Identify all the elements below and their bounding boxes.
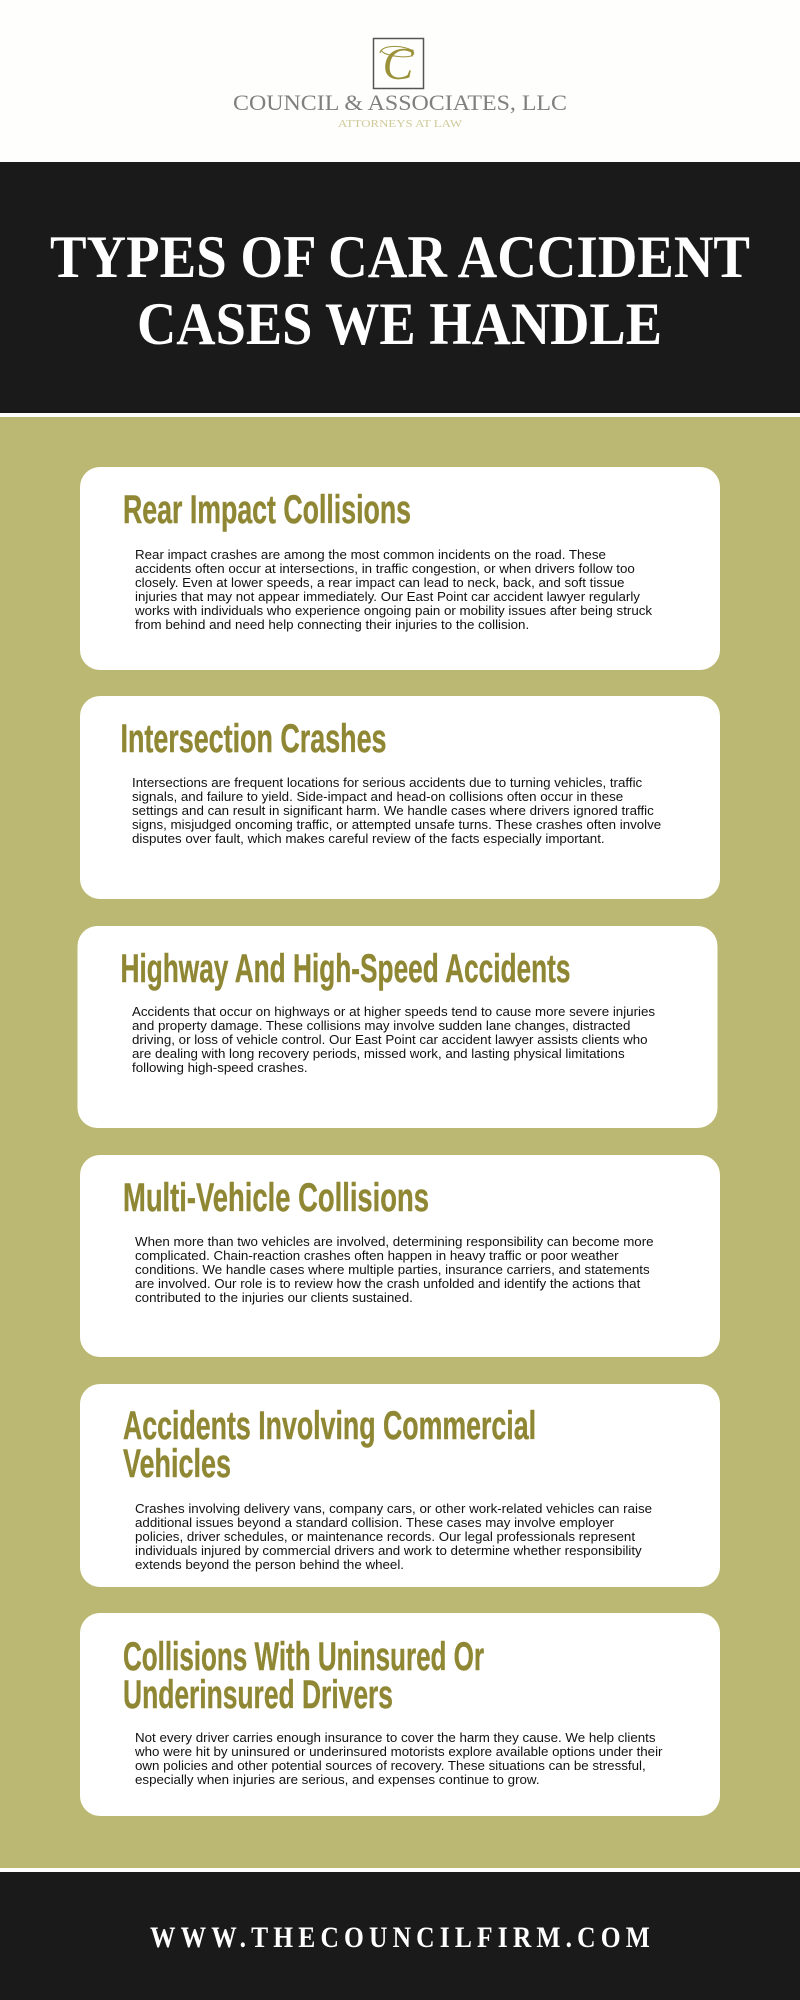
body text: When more than two vehicles are involved, determining responsibility can become more xyxy=(135,1234,654,1249)
body text xyxy=(132,1004,655,1075)
body text xyxy=(132,775,661,846)
body text: settings and can result in significant harm. We handle cases where drivers ignored traffic xyxy=(132,803,654,818)
title band xyxy=(0,162,800,413)
body text: own policies and other potential sources of recovery. These situations can be stressful, xyxy=(135,1758,646,1773)
body text: contributed to the injuries our clients sustained. xyxy=(135,1290,413,1305)
body text: driving, or loss of vehicle control. Our East Point car accident lawyer assists clients who xyxy=(132,1032,648,1047)
body text: signals, and failure to yield. Side-impact and head-on collisions often occur in these xyxy=(132,789,623,804)
heading: Accidents Involving Commercial xyxy=(123,1404,536,1448)
body text xyxy=(134,547,652,632)
heading: Intersection Crashes xyxy=(120,717,386,761)
body text: extends beyond the person behind the wheel. xyxy=(135,1557,404,1572)
body text: policies, driver schedules, or maintenance records. Our legal professionals represent xyxy=(135,1529,635,1544)
body text: additional issues beyond a standard collision. These cases may involve employer xyxy=(135,1515,615,1530)
body text: following high-speed crashes. xyxy=(132,1060,308,1075)
body text: especially when injuries are serious, and expenses continue to grow. xyxy=(135,1772,540,1787)
icon: monogram box xyxy=(374,38,424,89)
heading: Rear Impact Collisions xyxy=(123,488,411,532)
tagline: ATTORNEYS AT LAW xyxy=(338,118,463,130)
title xyxy=(50,224,750,357)
card: intersection crashes xyxy=(80,696,720,899)
body text: injuries that may not appear immediately. Our East Point car accident lawyer regularly xyxy=(135,589,640,604)
firm name: COUNCIL & ASSOCIATES, LLC xyxy=(233,90,567,115)
body text: individuals injured by commercial drivers and work to determine whether responsibility xyxy=(135,1543,642,1558)
body text xyxy=(134,1730,663,1787)
body text: complicated. Chain-reaction crashes often happen in heavy traffic or poor weather xyxy=(135,1248,619,1263)
body text: disputes over fault, which makes careful review of the facts especially important. xyxy=(132,831,605,846)
body text: works with individuals who experience ongoing pain or mobility issues after being struck xyxy=(134,603,652,618)
title: CASES WE HANDLE xyxy=(137,291,662,357)
body text: and property damage. These collisions may involve sudden lane changes, distracted xyxy=(132,1018,630,1033)
heading: Underinsured Drivers xyxy=(123,1673,393,1717)
body text: Intersections are frequent locations for serious accidents due to turning vehicles, traffic xyxy=(132,775,643,790)
card: collisions with uninsured or underinsured drivers xyxy=(80,1613,720,1816)
body text: are dealing with long recovery periods, missed work, and lasting physical limitations xyxy=(132,1046,625,1061)
footer band xyxy=(0,1872,800,2000)
card: highway and high-speed accidents xyxy=(78,926,718,1128)
body text: Rear impact crashes are among the most common incidents on the road. These xyxy=(135,547,606,562)
body text: conditions. We handle cases where multiple parties, insurance carriers, and statements xyxy=(135,1262,650,1277)
title: TYPES OF CAR ACCIDENT xyxy=(50,224,750,290)
logo xyxy=(233,38,567,130)
body text: Accidents that occur on highways or at higher speeds tend to cause more severe injuries xyxy=(132,1004,655,1019)
body text xyxy=(135,1501,652,1572)
heading xyxy=(123,1404,536,1486)
heading: Vehicles xyxy=(123,1442,231,1486)
body text: Not every driver carries enough insurance to cover the harm they cause. We help clients xyxy=(135,1730,656,1745)
website url: WWW.THECOUNCILFIRM.COM xyxy=(150,1921,650,1955)
card: rear impact collisions xyxy=(80,467,720,670)
body text xyxy=(135,1234,654,1305)
icon: monogram box: C xyxy=(383,38,415,89)
body text: who were hit by uninsured or underinsured motorists explore available options under their xyxy=(134,1744,663,1759)
olive content panel xyxy=(0,417,800,1868)
card: accidents involving commercial vehicles xyxy=(80,1384,720,1587)
body text: accidents often occur at intersections, in traffic congestion, or when drivers follow too xyxy=(135,561,635,576)
heading: Collisions With Uninsured Or xyxy=(123,1635,484,1679)
heading: Multi-Vehicle Collisions xyxy=(123,1176,429,1220)
card: multi-vehicle collisions xyxy=(80,1155,720,1357)
body text: signs, misjudged oncoming traffic, or attempted unsafe turns. These crashes often involve xyxy=(132,817,661,832)
heading xyxy=(123,1635,484,1717)
body text: are involved. Our role is to review how the crash unfolded and identify the actions that xyxy=(135,1276,641,1291)
body text: closely. Even at lower speeds, a rear impact can lead to neck, back, and soft tissue xyxy=(135,575,624,590)
heading: Highway And High-Speed Accidents xyxy=(120,947,570,991)
body text: from behind and need help connecting their injuries to the collision. xyxy=(135,617,529,632)
body text: Crashes involving delivery vans, company cars, or other work-related vehicles can raise xyxy=(135,1501,652,1516)
